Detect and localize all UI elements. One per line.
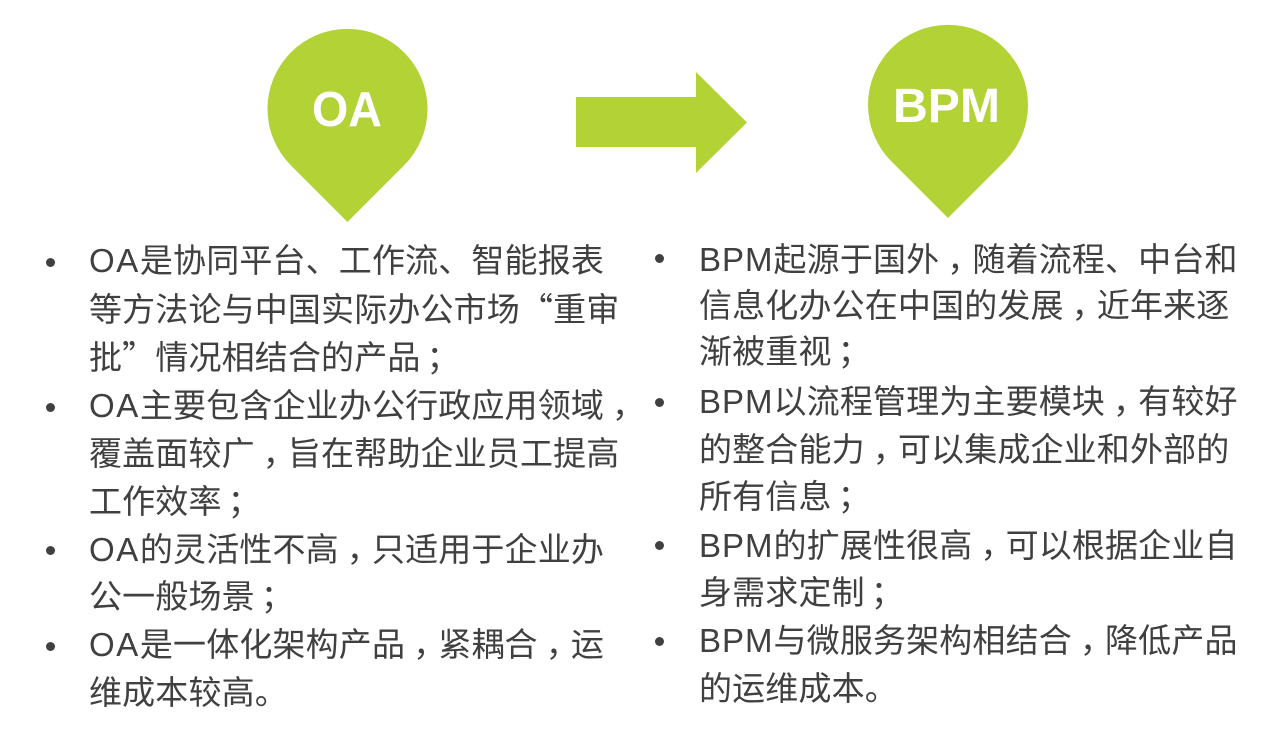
panel: OA points: [46, 242, 645, 711]
text: OA point 1: OA是协同平台、工作流、智能报表: [89, 242, 604, 279]
text: OA point 3: 公一般场景；: [89, 578, 294, 615]
text: BPM point 2: [655, 383, 1238, 515]
icon: OA pin: [268, 28, 428, 222]
text: BPM point 4: 的运维成本。: [699, 670, 898, 707]
text: BPM point 1: 渐被重视；: [699, 333, 871, 370]
text: OA point 2: OA主要包含企业办公行政应用领域，: [89, 387, 645, 424]
text: OA point 4: [46, 626, 604, 711]
text: BPM point 4: [655, 622, 1238, 707]
text: BPM point 2: 所有信息；: [699, 478, 871, 515]
text: BPM point 1: 信息化办公在中国的发展，近年来逐: [699, 287, 1229, 324]
text: OA point 1: [46, 242, 619, 379]
text: BPM point 4: BPM与微服务架构相结合，降低产品: [699, 622, 1238, 659]
text: OA point 1: 批”情况相结合的产品；: [89, 331, 460, 379]
text: BPM point 2: BPM以流程管理为主要模块，有较好: [699, 383, 1238, 420]
text: OA point 2: [46, 387, 645, 520]
text: OA point 3: OA的灵活性不高，只适用于企业办: [89, 531, 604, 568]
arrow: OA to BPM: [576, 72, 747, 173]
text: OA point 1: 等方法论与中国实际办公市场“重审: [89, 283, 619, 331]
text: BPM point 3: [655, 527, 1238, 611]
text: OA point 3: [46, 531, 604, 615]
icon: OA pin: OA: [312, 83, 382, 137]
text: BPM point 1: BPM起源于国外，随着流程、中台和: [699, 241, 1238, 278]
text: OA point 2: 工作效率；: [89, 483, 261, 520]
text: OA point 4: OA是一体化架构产品，紧耦合，运: [89, 626, 604, 663]
icon: BPM pin: [868, 24, 1028, 218]
icon: BPM pin: BPM: [893, 80, 1000, 133]
text: OA point 2: 覆盖面较广，旨在帮助企业员工提高: [89, 435, 619, 472]
text: BPM point 3: BPM的扩展性很高，可以根据企业自: [699, 527, 1238, 564]
text: BPM point 1: [655, 241, 1238, 370]
text: BPM point 3: 身需求定制；: [699, 574, 904, 611]
text: BPM point 2: 的整合能力，可以集成企业和外部的: [699, 431, 1229, 468]
text: OA point 4: 维成本较高。: [89, 674, 288, 711]
panel: BPM points: [655, 241, 1238, 707]
